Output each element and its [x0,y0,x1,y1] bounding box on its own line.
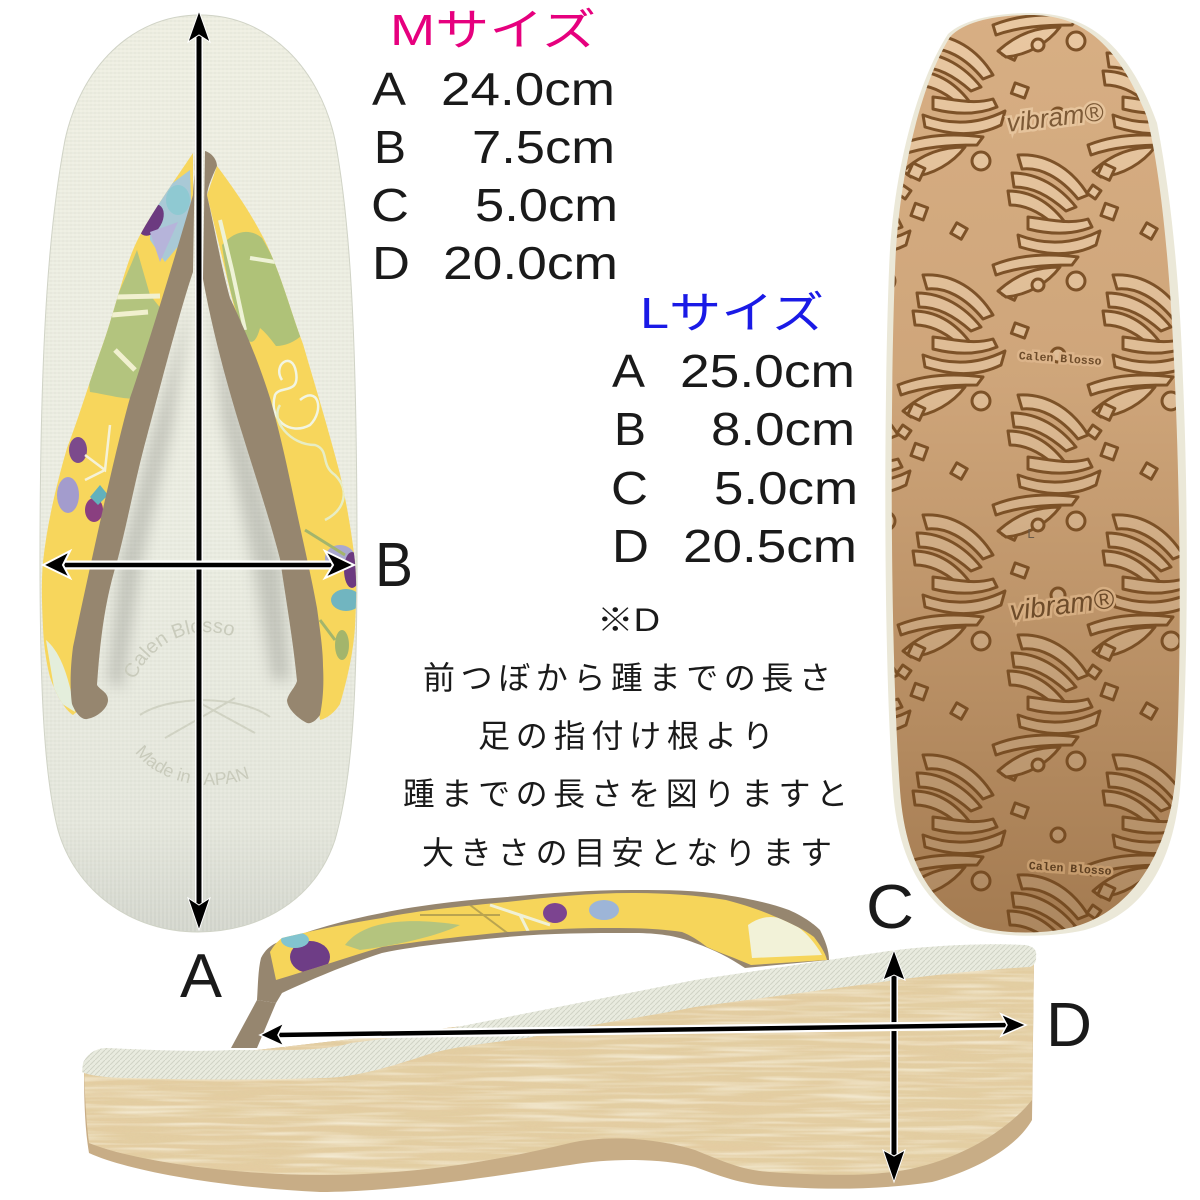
L value B: 8.0cm [711,403,855,455]
note heading: ※D [597,602,660,638]
strap back post [231,1000,276,1048]
right thong strap [207,166,361,720]
sole shading [892,235,1180,932]
L row B: B [614,403,646,455]
L size heading: Lサイズ [640,289,824,338]
L row C: C [611,462,648,514]
arrow C [883,950,905,1182]
size mark: L [1027,526,1035,541]
note line 1: 前つぼから踵までの長さ [423,660,831,696]
note line 4: 大きさの目安となります [422,835,832,871]
outsole band [84,960,1034,1192]
M value D: 20.0cm [443,237,618,289]
L value D: 20.5cm [683,520,857,572]
embossed logo [125,620,270,785]
embossed logo: Calen Blosso [125,620,234,677]
side strap yellow [270,893,827,980]
flower [325,545,355,560]
left brown piping [71,152,195,719]
M row A: A [372,63,406,115]
M row B: B [374,121,406,173]
strap shadow on the sole [108,300,290,690]
tan patterned sole [880,0,1190,940]
side strap brown [257,890,829,1003]
right brown piping [203,151,323,723]
label D: D [1046,991,1092,1060]
sole bottom view [880,0,1190,940]
swirl [274,361,318,429]
M value A: 24.0cm [441,63,615,115]
M value B: 7.5cm [472,121,615,173]
sandal side view [80,890,1040,1192]
brand text bottom: Calen Blosso [1028,860,1112,879]
green leaf [222,232,302,346]
L value C: 5.0cm [714,462,858,514]
label B: B [375,531,413,600]
flower [150,170,192,262]
note text block [403,602,848,871]
L row D: D [612,520,649,572]
vibram logo lower: vibram® [1008,583,1116,626]
cream top rim [82,944,1036,1080]
label C: C [866,873,914,942]
M row C: C [371,179,409,231]
green leaf [89,250,162,398]
wood grain [80,960,1040,1190]
cream rim [885,13,1187,936]
arrow B [43,551,354,578]
arrow A [188,11,210,930]
arrow D [260,1014,1026,1046]
note line 2: 足の指付け根より [478,718,774,754]
buds [69,437,87,463]
L row A: A [612,345,645,397]
M size table [371,6,618,289]
M size heading: Mサイズ [390,6,596,55]
M value C: 5.0cm [475,179,618,231]
L size table [611,289,858,572]
sole top surface [40,15,357,932]
L value A: 25.0cm [680,345,855,397]
left thong strap [42,153,193,715]
label A: A [180,942,223,1011]
sandal top view [40,14,358,932]
embossed logo: Made in JAPAN [136,745,249,785]
brand text middle: Calen Blosso [1018,350,1102,369]
vibram logo top: vibram® [1005,96,1106,138]
wood wedge [84,960,1034,1175]
M row D: D [372,237,410,289]
note line 3: 踵までの長さを図りますと [403,776,848,812]
